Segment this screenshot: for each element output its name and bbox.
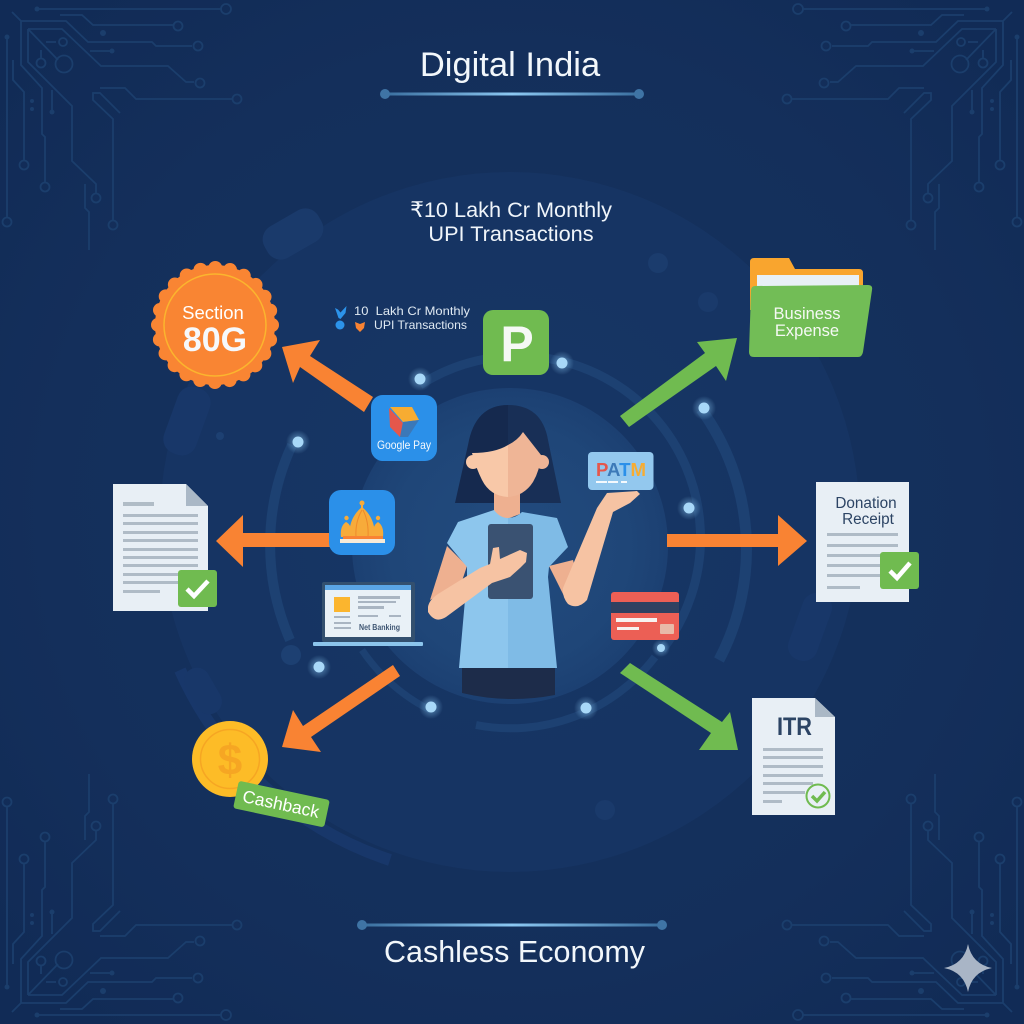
- coin with cashback tag: [192, 721, 330, 827]
- icon: P app: P: [500, 316, 534, 372]
- phone: [488, 524, 533, 599]
- document: Donation Receipt: Donation: [835, 495, 897, 512]
- badge: Section 80G: Section: [182, 302, 244, 323]
- glowing nodes: [286, 351, 716, 720]
- badge: Section 80G: [155, 265, 275, 385]
- icon: net banking laptop: Net Banking: [359, 623, 400, 632]
- document: ITR: [752, 698, 835, 815]
- icon: Google Pay: Google Pay: [377, 438, 431, 452]
- document: ITR: ITR: [777, 713, 812, 741]
- headline: UPI transactions: [410, 197, 612, 246]
- icon: sparkle: [944, 944, 992, 992]
- title: Digital India: [420, 46, 601, 84]
- document: Donation Receipt: [816, 482, 919, 602]
- skirt: [462, 668, 555, 699]
- coin with cashback tag: Cashback: [241, 786, 321, 822]
- icon: temple: [329, 490, 395, 555]
- arrow: to left document: [216, 515, 332, 567]
- icon: Paytm card: [588, 452, 654, 490]
- central rings and background shapes: [159, 172, 860, 872]
- folder: Business Expense: Business: [774, 305, 840, 323]
- title divider: [380, 89, 644, 99]
- icon: Google Pay: [371, 395, 437, 461]
- footer divider: [357, 920, 667, 930]
- arrow: to ITR: [620, 663, 738, 750]
- badge: Section 80G: 80G: [183, 321, 247, 359]
- headline: UPI transactions: UPI Transactions: [428, 221, 594, 246]
- shirt: [447, 510, 568, 668]
- footer title: Cashless Economy: [384, 935, 646, 969]
- coin with cashback tag: $: [218, 736, 242, 785]
- right forearm and hand: [563, 491, 640, 606]
- icon: red credit card: [611, 592, 679, 640]
- small UPI label: [335, 304, 470, 332]
- neck: [494, 492, 520, 519]
- ears and face: [466, 432, 549, 497]
- left forearm and hand: [428, 547, 527, 620]
- hair: [455, 405, 561, 503]
- arrow: to business expense: [620, 338, 737, 427]
- icon: Paytm card: PATM: [596, 460, 646, 480]
- document with check: [113, 484, 217, 611]
- document: Donation Receipt: Receipt: [842, 511, 895, 528]
- left upper arm: [430, 546, 467, 600]
- icon: P app: [483, 310, 549, 375]
- right upper arm: [549, 560, 582, 600]
- arrow: to donation receipt: [667, 515, 807, 566]
- arrow: to cashback: [282, 665, 400, 752]
- arrow: to Section 80G: [282, 340, 373, 412]
- icon: net banking laptop: [313, 582, 423, 646]
- folder: Business Expense: [749, 258, 872, 357]
- headline: UPI transactions: ₹10 Lakh Cr Monthly: [410, 197, 612, 222]
- folder: Business Expense: Expense: [775, 322, 839, 340]
- small UPI label: 10 Lakh Cr Monthly: [354, 304, 470, 318]
- person holding phone and card: [428, 405, 640, 699]
- small UPI label: UPI Transactions: [374, 318, 467, 332]
